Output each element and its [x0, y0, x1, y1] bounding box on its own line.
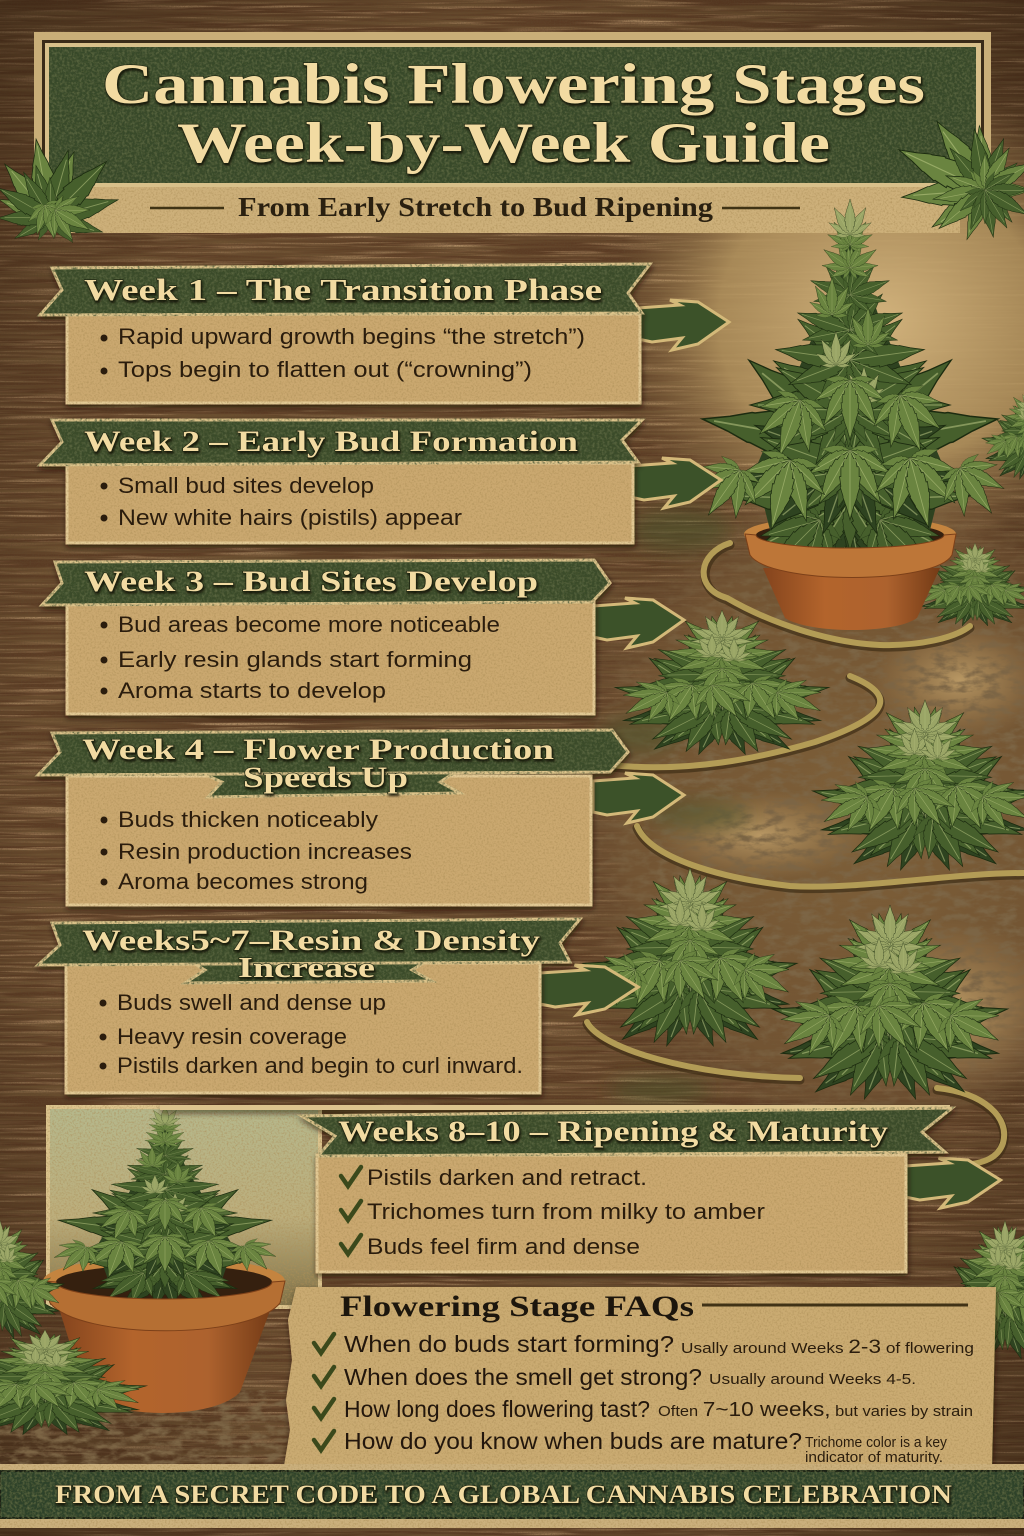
bullets — [100, 612, 500, 703]
panel — [317, 1155, 906, 1272]
heading: Week 3 – Bud Sites Develop — [84, 565, 538, 598]
checklist — [341, 1165, 765, 1259]
picture frame: mature plant — [0, 1106, 320, 1465]
main title: Cannabis Flowering Stages — [102, 53, 925, 116]
heading: Week 4 – Flower Production — [82, 733, 554, 766]
heading — [82, 733, 554, 794]
faq 2: When does the smell get strong? — [344, 1364, 702, 1390]
corner leaves: top right — [873, 95, 1024, 258]
garden ground — [590, 116, 1024, 1105]
pot body — [58, 1305, 272, 1413]
paper — [284, 1287, 996, 1466]
faq 4: indicator of maturity. — [805, 1450, 943, 1466]
potted plant: week 1 tree — [680, 199, 1020, 630]
heading: Speeds Up — [243, 761, 408, 794]
subtitle: From Early Stretch to Bud Ripening — [238, 192, 714, 222]
foliage: upper left — [0, 1215, 72, 1350]
pot back and soil — [744, 516, 956, 552]
heading: Weeks5~7–Resin & Density — [82, 924, 540, 957]
ribbon — [42, 560, 610, 605]
bullets: Rapid upward growth begins “the stretch”) — [118, 324, 585, 349]
heading: Flowering Stage FAQs — [340, 1290, 694, 1323]
heading: Week 2 – Early Bud Formation — [84, 425, 578, 458]
arrow: weeks 8-10 — [905, 1158, 1001, 1208]
pot back and soil — [43, 1257, 285, 1305]
ribbon — [38, 730, 628, 775]
bullets: Aroma becomes strong — [118, 869, 368, 894]
main title — [102, 53, 925, 175]
ribbon — [38, 919, 580, 965]
stage: weeks 8-10 — [160, 1105, 952, 1272]
ribbon tail — [190, 768, 462, 797]
heading: Week 1 – The Transition Phase — [84, 272, 602, 307]
checklist: Pistils darken and retract. — [367, 1165, 647, 1190]
faq 4: How do you know when buds are mature? — [344, 1428, 802, 1454]
bullets — [100, 807, 412, 894]
top frame rule — [160, 1105, 950, 1110]
footer text: FROM A SECRET CODE TO A GLOBAL CANNABIS CELEBRATION — [55, 1480, 952, 1509]
plant: stage bush 4 — [757, 897, 1023, 1117]
faq 3 — [314, 1396, 973, 1422]
pot front rim — [745, 534, 956, 578]
faq 3: How long does flowering tast? — [344, 1396, 650, 1422]
bullets: New white hairs (pistils) appear — [118, 505, 462, 530]
arrow: week 1 — [638, 300, 729, 350]
ribbon — [40, 420, 642, 465]
plant: stage bush 1 — [601, 604, 843, 768]
corner leaves: top left — [0, 125, 143, 259]
arrow: week 3 — [593, 598, 684, 648]
main title: Week-by-Week Guide — [177, 112, 830, 175]
stage: weeks 5-7 — [38, 919, 580, 1093]
stage: week 2 — [40, 420, 642, 543]
bullets: Small bud sites develop — [118, 473, 374, 498]
panel — [66, 963, 540, 1093]
garden hoses path — [587, 543, 1024, 1168]
bullets — [100, 324, 585, 382]
arrow: weeks 5-7 — [540, 965, 638, 1015]
faq 3: Often 7~10 weeks, but varies by strain — [658, 1399, 973, 1421]
bullets: Aroma starts to develop — [118, 678, 386, 703]
stage: week 4 — [38, 730, 628, 905]
stage: week 3 — [42, 560, 610, 714]
heading: Increase — [238, 952, 375, 984]
plant tree — [680, 199, 1020, 614]
arrow: week 4 — [593, 773, 684, 823]
plant: stage bush 2 — [798, 692, 1024, 886]
pot body — [763, 568, 940, 630]
faq 4: Trichome color is a key — [805, 1435, 948, 1451]
plant: side foliage behind pot — [909, 539, 1024, 634]
panel — [67, 463, 633, 543]
checklist: Trichomes turn from milky to amber — [367, 1199, 765, 1224]
foliage: lower left — [0, 1325, 160, 1444]
ribbon tail — [185, 958, 432, 983]
faq 1 — [314, 1331, 974, 1358]
bullets — [100, 990, 523, 1078]
faq 1: When do buds start forming? — [344, 1331, 674, 1357]
footer banner — [0, 1464, 1024, 1528]
plant: stage bush 3 — [569, 860, 811, 1062]
bullets: Buds thicken noticeably — [118, 807, 378, 832]
arrow: week 2 — [630, 458, 721, 508]
pot front rim — [43, 1281, 285, 1331]
heading — [82, 924, 540, 984]
moss patches — [600, 508, 750, 1104]
bullets: Bud areas become more noticeable — [118, 612, 500, 637]
faq 1: Usally around Weeks 2-3 of flowering — [681, 1337, 974, 1358]
faq 2 — [314, 1364, 916, 1390]
bullets: Pistils darken and begin to curl inward. — [117, 1053, 523, 1078]
panel — [67, 776, 591, 905]
bullets: Early resin glands start forming — [118, 647, 472, 672]
checklist: Buds feel firm and dense — [367, 1234, 640, 1259]
panel: FAQs — [284, 1287, 996, 1466]
stage: week 1 — [40, 264, 650, 403]
bullets — [100, 473, 462, 530]
panel — [67, 314, 640, 403]
ribbon — [40, 264, 650, 315]
plant tree — [42, 1106, 288, 1322]
subtitle strip — [60, 186, 960, 233]
bullets: Tops begin to flatten out (“crowning”) — [118, 357, 532, 382]
bullets: Buds swell and dense up — [117, 990, 386, 1015]
bullets: Heavy resin coverage — [117, 1024, 347, 1049]
heading: Weeks 8–10 – Ripening & Maturity — [338, 1115, 888, 1148]
faq 4 — [314, 1428, 948, 1466]
faq 2: Usually around Weeks 4-5. — [709, 1372, 916, 1388]
ribbon — [302, 1108, 952, 1156]
bullets: Resin production increases — [118, 839, 412, 864]
plant: top right foliage edge — [976, 387, 1024, 488]
title block — [34, 32, 991, 233]
plant: right edge foliage — [921, 1215, 1024, 1372]
panel — [67, 602, 594, 714]
